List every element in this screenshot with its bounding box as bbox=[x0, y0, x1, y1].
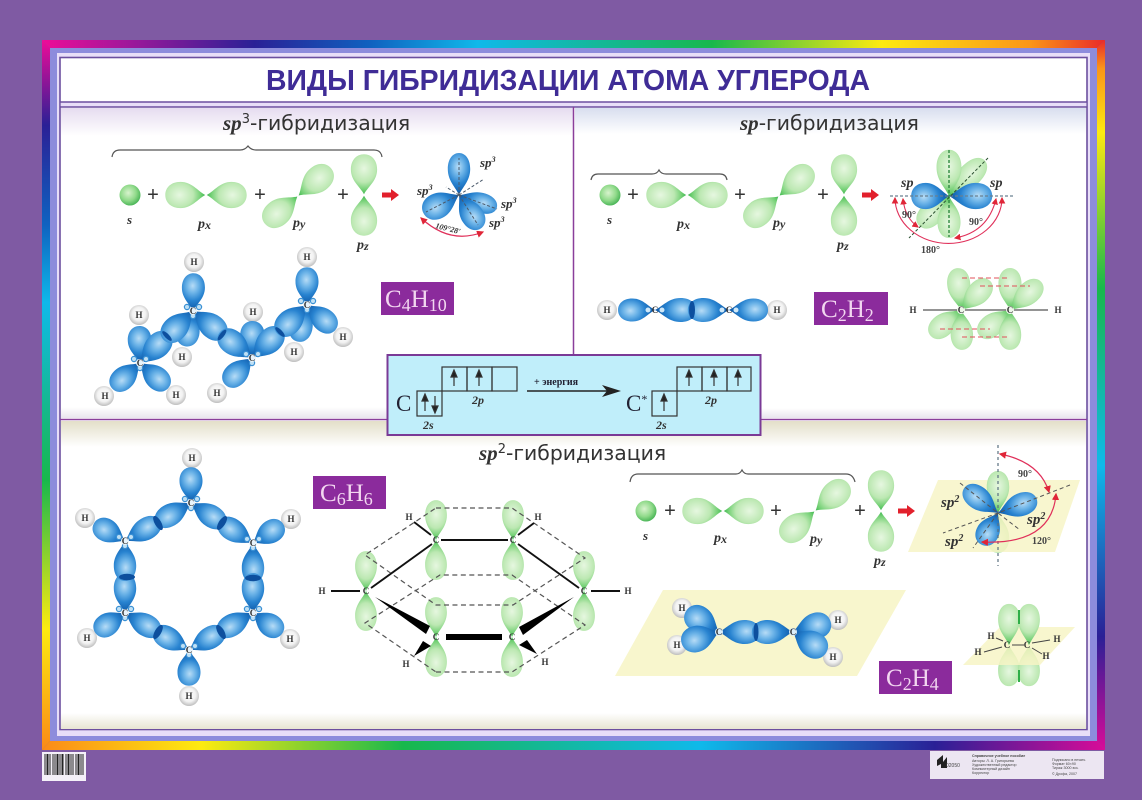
benzene structure: H bbox=[624, 586, 632, 596]
C2H2 structure: C bbox=[1007, 305, 1013, 315]
benzene orbital ring: H bbox=[286, 634, 294, 644]
badge: C2H4: C bbox=[886, 665, 903, 692]
arrow bbox=[382, 189, 399, 201]
icon: py orbital bbox=[738, 158, 820, 234]
heading: sp3: -гибридизация bbox=[250, 111, 410, 135]
plus signs: + bbox=[664, 500, 676, 522]
publisher imprint bbox=[930, 751, 1104, 779]
C2H4 structure bbox=[963, 604, 1075, 686]
C4H10 molecule: C bbox=[190, 306, 196, 316]
sp3 hybrid orbital: 3 bbox=[491, 155, 496, 164]
brace bbox=[112, 146, 382, 157]
energy diagram box: C bbox=[626, 391, 641, 416]
C4H10 molecule: C bbox=[137, 358, 143, 368]
plus signs: + bbox=[627, 184, 639, 206]
benzene orbital ring: C bbox=[250, 608, 256, 618]
energy diagram box: 2s bbox=[422, 418, 434, 432]
energy diagram box: C bbox=[396, 391, 411, 416]
sp3 hybrid orbital: sp bbox=[489, 215, 501, 230]
publisher imprint: 02050 bbox=[946, 763, 960, 769]
orbital labels: z bbox=[880, 555, 886, 569]
benzene orbital ring: C bbox=[122, 608, 128, 618]
icon: pz orbital bbox=[351, 154, 377, 236]
heading: sp: sp-гибридизация bbox=[739, 111, 919, 135]
C2H4 structure: C bbox=[1024, 640, 1030, 650]
plus signs: + bbox=[337, 184, 349, 206]
C4H10 molecule: H bbox=[249, 307, 257, 317]
orbital labels: z bbox=[363, 239, 369, 253]
orbital labels: p bbox=[810, 532, 817, 547]
sp hybrid orbital: 90° bbox=[902, 210, 916, 221]
badge: C4H10: C bbox=[385, 286, 402, 313]
plus signs bbox=[147, 184, 349, 206]
icon: px orbital bbox=[165, 182, 247, 208]
orbital labels: s bbox=[606, 212, 612, 227]
C2H4 plane and molecule: C bbox=[716, 627, 722, 637]
C2H4 structure: H bbox=[1053, 634, 1061, 644]
orbital labels: p bbox=[837, 238, 844, 253]
badge: C6H6: 6 bbox=[364, 489, 373, 509]
C4H10 molecule: H bbox=[135, 310, 143, 320]
C4H10 molecule: H bbox=[339, 332, 347, 342]
brace bbox=[630, 470, 855, 482]
icon: px orbital bbox=[646, 182, 728, 208]
icon: pz orbital bbox=[868, 470, 894, 552]
orbital labels: s bbox=[642, 528, 648, 543]
orbital labels: p bbox=[773, 216, 780, 231]
benzene orbital ring: H bbox=[81, 513, 89, 523]
benzene orbital ring: H bbox=[185, 691, 193, 701]
badge: C6H6 bbox=[313, 476, 386, 509]
badge: C2H2: 2 bbox=[865, 305, 874, 325]
brace bbox=[591, 170, 727, 180]
C2H4 structure: H bbox=[1042, 651, 1050, 661]
heading: sp3: sp bbox=[222, 111, 242, 135]
icon: s orbital bbox=[636, 500, 656, 522]
C2H2 structure bbox=[909, 267, 1062, 350]
heading: sp2: sp bbox=[478, 441, 498, 465]
energy diagram box: + энергия bbox=[534, 377, 579, 388]
C2H4 plane and molecule: H bbox=[834, 615, 842, 625]
C2H4 plane and molecule: C bbox=[790, 627, 796, 637]
C2H2 molecule bbox=[597, 298, 787, 322]
sp2 hybrid orbital bbox=[908, 445, 1080, 566]
orbital labels bbox=[606, 212, 849, 253]
orbital labels: y bbox=[815, 533, 823, 547]
panel: sp2 hybridization bbox=[61, 421, 1086, 729]
barcode bbox=[42, 752, 86, 781]
C2H4 plane and molecule: H bbox=[678, 603, 686, 613]
orbital labels: p bbox=[357, 238, 364, 253]
sp hybrid orbital: 180° bbox=[921, 245, 940, 256]
badge: C2H2: 2 bbox=[838, 305, 847, 325]
C2H2 structure: C bbox=[958, 305, 964, 315]
C4H10 molecule bbox=[94, 247, 353, 406]
energy diagram box: 2p bbox=[704, 393, 717, 407]
orbital labels: y bbox=[778, 217, 786, 231]
sp3 hybrid orbital: sp bbox=[501, 196, 513, 211]
sp2 hybrid orbital: 90° bbox=[1018, 469, 1032, 480]
plus signs: + bbox=[854, 500, 866, 522]
benzene orbital ring bbox=[75, 448, 301, 706]
icon: py orbital bbox=[257, 158, 339, 234]
plus signs: + bbox=[147, 184, 159, 206]
orbital labels: x bbox=[683, 218, 690, 232]
C2H2 molecule: C bbox=[726, 305, 732, 315]
C2H2 molecule: C bbox=[652, 305, 658, 315]
orbital labels: p bbox=[714, 531, 721, 546]
benzene orbital ring: C bbox=[186, 645, 192, 655]
sp3 hybrid orbital: 3 bbox=[500, 215, 505, 224]
benzene structure: H bbox=[541, 657, 549, 667]
C2H4 plane and molecule bbox=[615, 590, 906, 676]
orbital labels: x bbox=[204, 218, 211, 232]
sp2 hybrid orbital: 120° bbox=[1032, 536, 1051, 547]
arrow bbox=[898, 505, 915, 517]
arrow bbox=[862, 189, 879, 201]
heading: sp2: -гибридизация bbox=[506, 441, 666, 465]
sp hybrid orbital: sp bbox=[900, 176, 913, 191]
C2H2 molecule: H bbox=[603, 305, 611, 315]
benzene structure: C bbox=[433, 632, 439, 642]
plus signs bbox=[664, 500, 866, 522]
C2H4 structure: H bbox=[987, 631, 995, 641]
benzene structure: C bbox=[433, 535, 439, 545]
plus signs: + bbox=[734, 184, 746, 206]
badge: C2H2: C bbox=[821, 296, 838, 323]
C4H10 molecule: H bbox=[190, 257, 198, 267]
sp2 hybrid orbital: 2 bbox=[957, 533, 963, 544]
orbital labels: z bbox=[843, 239, 849, 253]
benzene structure: H bbox=[402, 659, 410, 669]
icon: s orbital bbox=[600, 184, 620, 206]
benzene orbital ring: H bbox=[188, 453, 196, 463]
icon: s orbital bbox=[120, 184, 140, 206]
heading: sp3: 3 bbox=[242, 112, 250, 127]
C2H2 structure: H bbox=[909, 305, 917, 315]
benzene orbital ring: H bbox=[287, 514, 295, 524]
badge: C6H6: C bbox=[320, 480, 337, 507]
badge: C6H6: H bbox=[346, 480, 364, 507]
sp2 hybrid orbital: sp bbox=[1027, 512, 1040, 528]
benzene structure: H bbox=[405, 512, 413, 522]
sp2 hybrid orbital: 2 bbox=[953, 494, 959, 505]
C4H10 molecule: H bbox=[101, 391, 109, 401]
publisher imprint: Корректор bbox=[972, 771, 989, 775]
icon: px orbital bbox=[682, 498, 764, 524]
plus signs bbox=[627, 184, 829, 206]
badge: C2H4: 4 bbox=[930, 674, 939, 694]
sp2 hybrid orbital: sp bbox=[945, 534, 958, 550]
benzene structure bbox=[318, 500, 632, 677]
sp hybrid orbital: sp bbox=[989, 176, 1002, 191]
C4H10 molecule: H bbox=[172, 390, 180, 400]
sp3 hybrid orbital: 109°28' bbox=[435, 221, 462, 236]
orbital labels: p bbox=[677, 217, 684, 232]
publisher imprint: © Дрофа, 2007 bbox=[1052, 772, 1077, 776]
C4H10 molecule: H bbox=[213, 388, 221, 398]
orbital labels: x bbox=[720, 532, 727, 546]
plus signs: + bbox=[254, 184, 266, 206]
orbital labels: s bbox=[126, 212, 132, 227]
orbital labels bbox=[642, 528, 886, 569]
energy diagram box: * bbox=[641, 392, 647, 406]
benzene structure: H bbox=[318, 586, 326, 596]
plus signs: + bbox=[817, 184, 829, 206]
C2H4 structure: H bbox=[974, 647, 982, 657]
benzene orbital ring: H bbox=[83, 633, 91, 643]
C4H10 molecule: H bbox=[290, 347, 298, 357]
C4H10 molecule: H bbox=[303, 252, 311, 262]
badge: C2H2 bbox=[814, 292, 888, 325]
C4H10 molecule: C bbox=[249, 353, 255, 363]
icon: py orbital bbox=[774, 473, 856, 549]
sp3 hybrid orbital: 3 bbox=[428, 183, 433, 192]
benzene structure: C bbox=[363, 586, 369, 596]
benzene orbital ring: C bbox=[250, 538, 256, 548]
publisher imprint: Тираж 3000 экз. bbox=[1052, 766, 1079, 770]
C2H4 structure: C bbox=[1004, 640, 1010, 650]
badge: C2H4: 2 bbox=[903, 674, 912, 694]
sp hybrid orbital bbox=[890, 150, 1013, 256]
orbital labels: p bbox=[293, 216, 300, 231]
C4H10 molecule: H bbox=[178, 352, 186, 362]
badge: C4H10: 4 bbox=[402, 295, 411, 315]
badge: C4H10: 10 bbox=[429, 295, 447, 315]
benzene orbital ring: C bbox=[122, 536, 128, 546]
C2H4 plane and molecule: H bbox=[829, 652, 837, 662]
sp3 hybrid orbital: sp bbox=[417, 183, 429, 198]
sp2 hybrid orbital: 2 bbox=[1039, 511, 1045, 522]
energy diagram box: 2p bbox=[471, 393, 484, 407]
electron arrows bbox=[422, 370, 741, 413]
sp3 hybrid orbital: sp bbox=[480, 155, 492, 170]
C2H2 structure: H bbox=[1054, 305, 1062, 315]
sp hybrid orbital: 90° bbox=[969, 217, 983, 228]
publisher imprint: Справочное учебное пособие bbox=[972, 754, 1025, 758]
plus signs: + bbox=[770, 500, 782, 522]
orbital labels: y bbox=[298, 217, 306, 231]
sp3 hybrid orbital: 3 bbox=[512, 196, 517, 205]
panel: sp3 hybridization bbox=[60, 107, 1087, 420]
energy diagram box: 2s bbox=[655, 418, 667, 432]
badge: C4H10 bbox=[381, 282, 454, 315]
sp2 hybrid orbital: sp bbox=[941, 495, 954, 511]
benzene structure: C bbox=[509, 632, 515, 642]
energy diagram box bbox=[388, 355, 760, 435]
orbital labels bbox=[126, 212, 369, 253]
publisher imprint: Компьютерный дизайн bbox=[972, 767, 1010, 771]
publisher imprint: Авторы: Л. А. Григорьева bbox=[972, 759, 1014, 763]
sp3 hybrid orbital bbox=[416, 153, 517, 236]
C2H2 molecule: H bbox=[773, 305, 781, 315]
icon: pz orbital bbox=[831, 154, 857, 236]
badge: C2H4 bbox=[879, 661, 952, 694]
C2H4 plane and molecule: H bbox=[673, 640, 681, 650]
benzene orbital ring: C bbox=[188, 498, 194, 508]
heading: sp2: 2 bbox=[498, 442, 506, 457]
badge: C2H4: H bbox=[912, 665, 930, 692]
panel: sp hybridization bbox=[575, 108, 1086, 418]
badge: C4H10: H bbox=[411, 286, 429, 313]
title: ВИДЫ ГИБРИДИЗАЦИИ АТОМА УГЛЕРОДА bbox=[266, 65, 870, 97]
publisher imprint: Подписано в печать bbox=[1052, 758, 1086, 762]
badge: C6H6: 6 bbox=[337, 489, 346, 509]
C4H10 molecule: C bbox=[304, 300, 310, 310]
orbital labels: p bbox=[198, 217, 205, 232]
orbital labels: p bbox=[874, 554, 881, 569]
publisher imprint: Формат 60×90 bbox=[1052, 762, 1076, 766]
benzene structure: C bbox=[510, 535, 516, 545]
benzene structure: C bbox=[581, 586, 587, 596]
badge: C2H2: H bbox=[847, 296, 865, 323]
benzene structure: H bbox=[534, 512, 542, 522]
publisher imprint: Художественный редактор bbox=[972, 763, 1017, 767]
